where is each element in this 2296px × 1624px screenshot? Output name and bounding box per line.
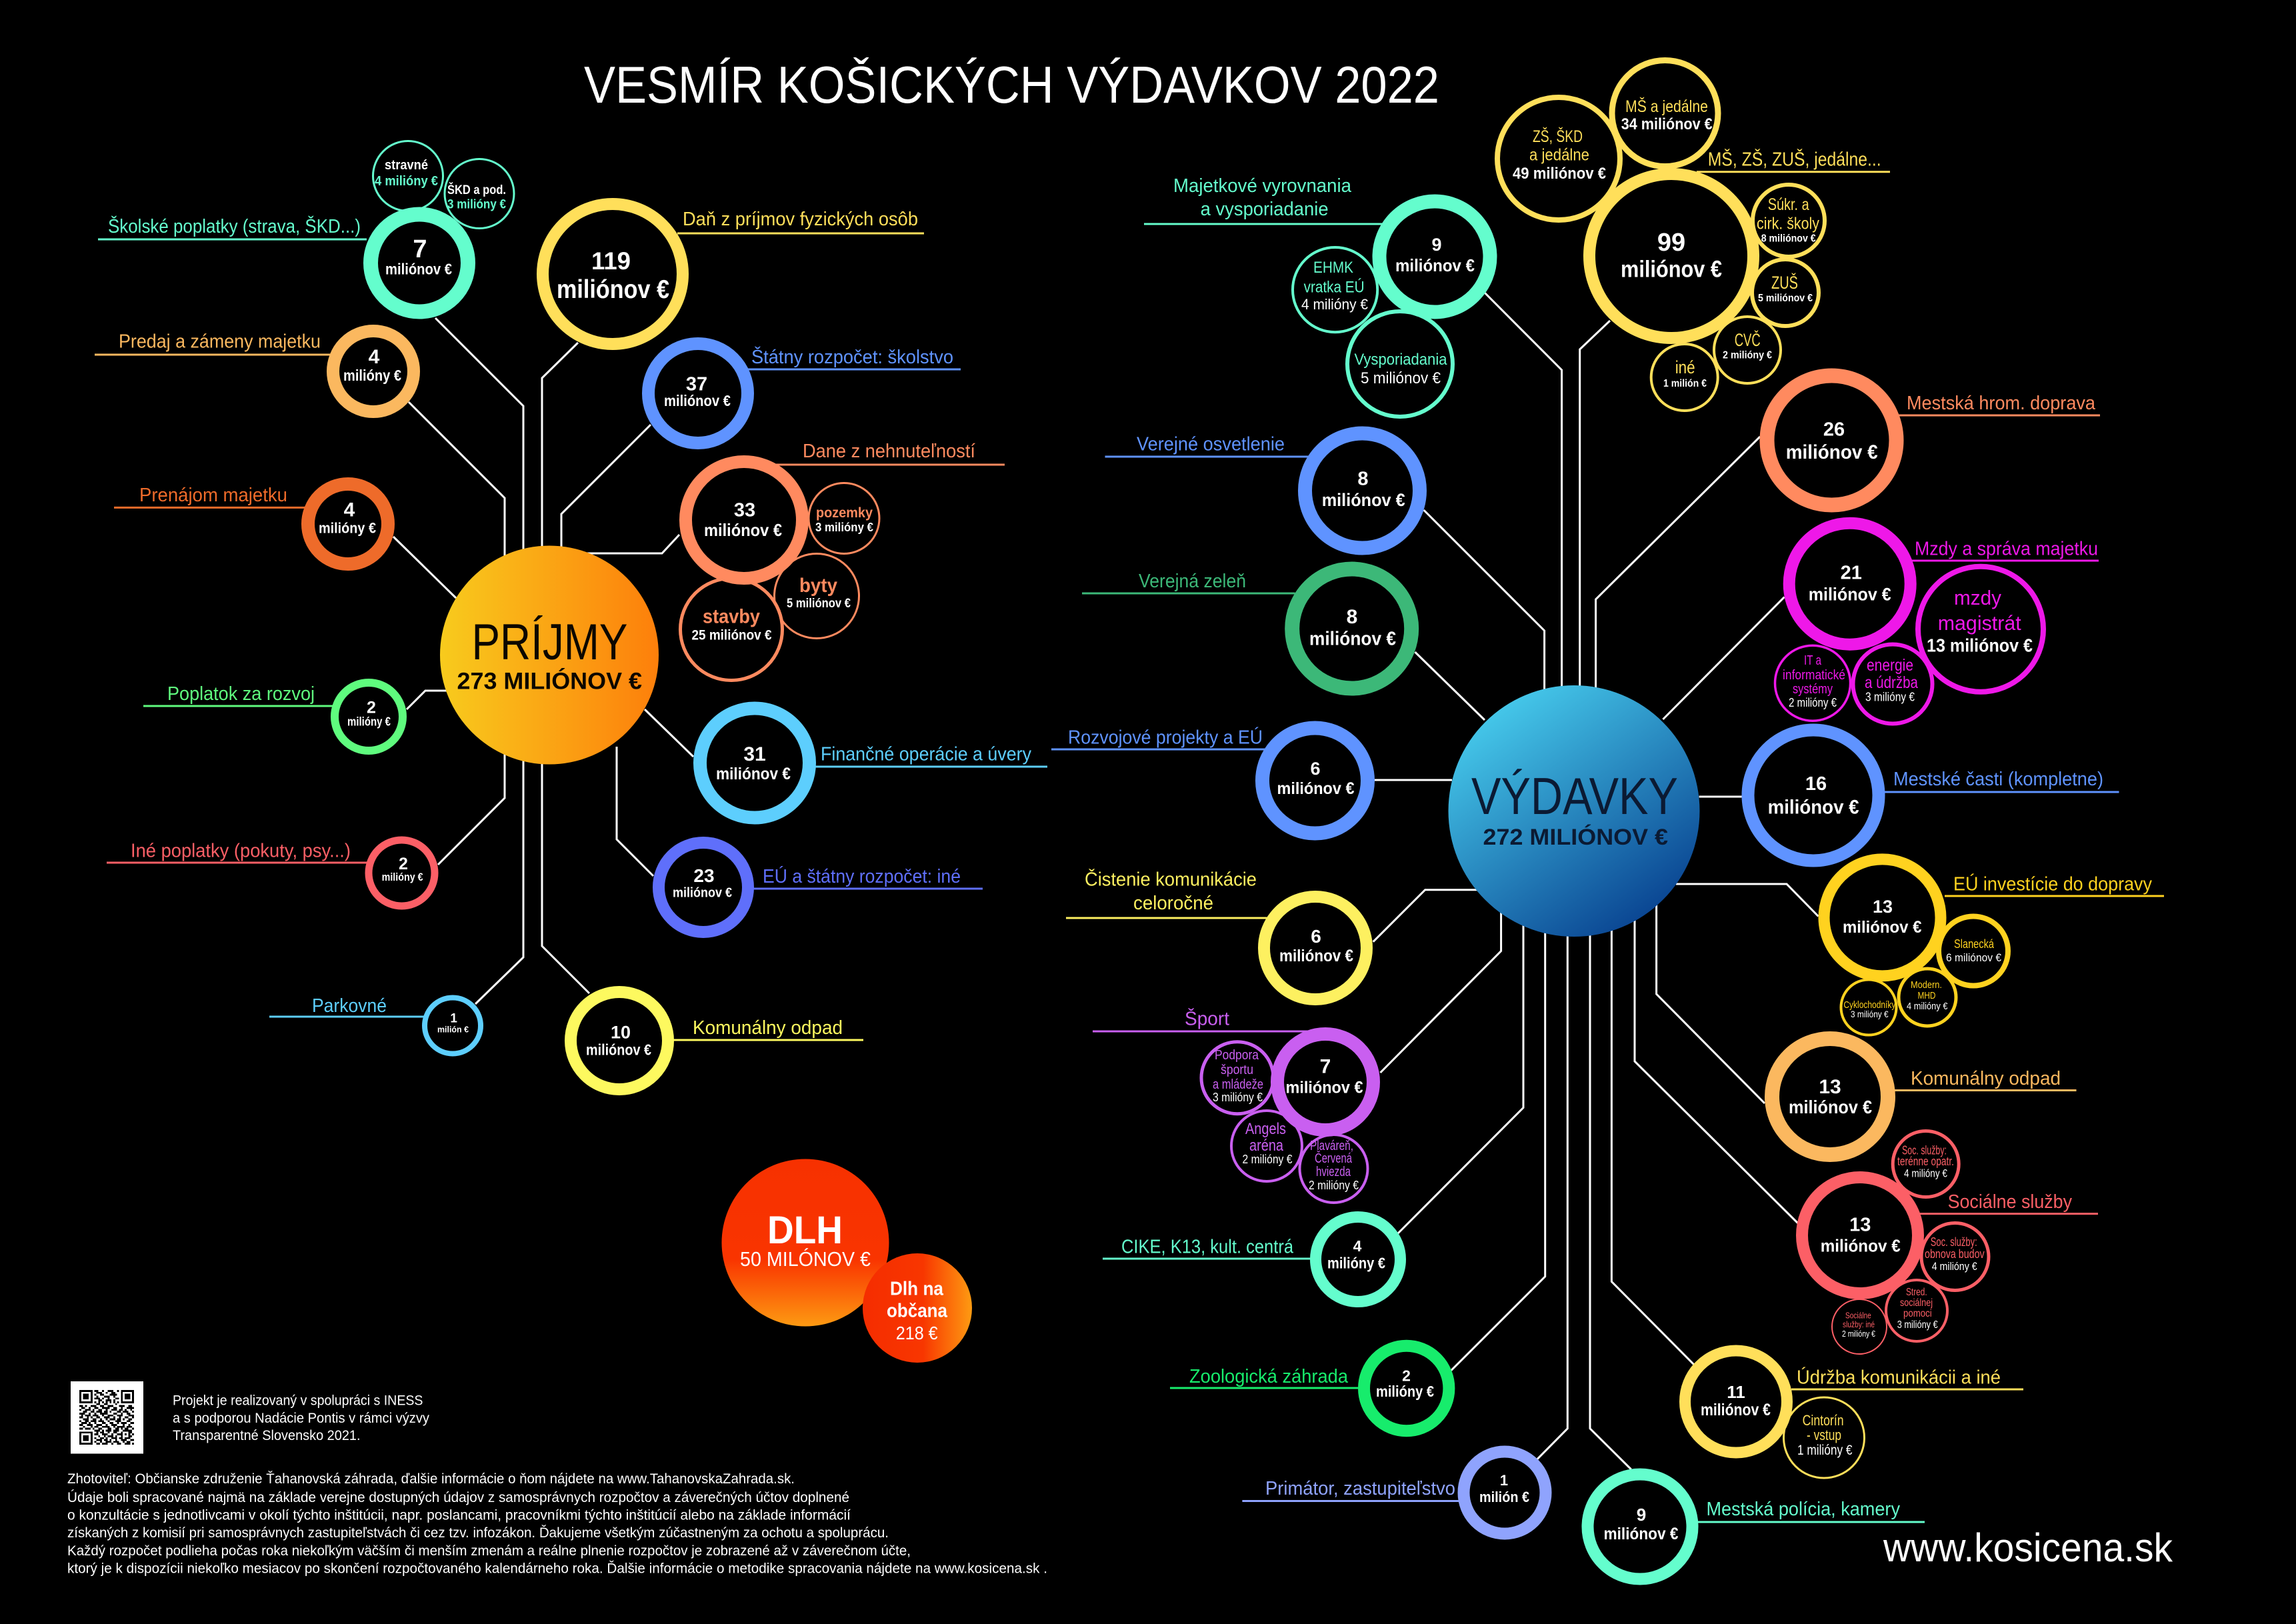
label: Rozvojové projekty: Rozvojové projekty a EÚ: [1068, 727, 1263, 749]
ring: 8 miliónov: miliónov €: [1322, 490, 1405, 510]
sub-bubble: CVČ: 2 milióny €: [1723, 349, 1772, 361]
sub-bubble: pozemky: pozemky: [816, 505, 873, 521]
sub-bubble: stravné: 4 milióny €: [375, 174, 438, 189]
sub-bubble: Stred. sociálnej pomoci: 3 milióny €: [1897, 1319, 1938, 1331]
ring: 16 miliónov: miliónov €: [1768, 797, 1859, 819]
sub-bubble: Cintorín: Cintorín: [1803, 1412, 1844, 1429]
label: Mzdy a správa majetku: Mzdy a správa majetku: [1915, 539, 2098, 560]
node: Komunálny odpad (príjmy): [571, 992, 863, 1089]
ring: 33 miliónov: 33: [734, 500, 755, 521]
node: Daň z príjmov: [543, 204, 924, 344]
sub-bubble: terénne opatrenia: [1893, 1131, 1959, 1197]
ring: 23 miliónov: 23: [693, 865, 715, 886]
sub-bubble: energie a údržba: [1853, 644, 1932, 724]
ring: 2 milióny: milióny €: [1376, 1383, 1434, 1400]
ring: 2 milióny: 2: [367, 698, 376, 717]
ring: 9 miliónov: [1588, 1475, 1692, 1579]
sub-bubble: pozemky: 3 milióny €: [815, 521, 873, 534]
sub-bubble: IT a informatické systémy: 2 milióny €: [1789, 696, 1837, 709]
ring: 9 miliónov: 9: [1431, 235, 1442, 255]
ring: 99 miliónov: [1589, 174, 1753, 338]
sub-bubble: Vysporiadania: Vysporiadania: [1355, 351, 1447, 369]
sub-bubble: iné: [1651, 344, 1718, 411]
hub: VÝDAVKY 272 miliónov: [1448, 685, 1700, 937]
ring: 2 milióny: [1364, 1346, 1449, 1431]
ring: 119 miliónov: miliónov €: [557, 275, 669, 304]
sub-bubble: Cyklochodníky: Cyklochodníky: [1843, 1000, 1896, 1011]
sub-bubble: byty: 5 miliónov €: [787, 597, 851, 611]
label: Parkovné: Parkovné: [312, 995, 387, 1017]
sub-bubble: Cintorín: - vstup: [1807, 1427, 1841, 1443]
hub: VÝDAVKY 272 miliónov: 272 MILIÓNOV €: [1483, 825, 1668, 850]
node: Verejné osvetlenie: [1105, 433, 1420, 548]
ring: 7 miliónov: 7: [413, 235, 427, 263]
ring: 11 miliónov: miliónov €: [1701, 1401, 1771, 1419]
sub-bubble: Angels aréna: aréna: [1249, 1137, 1284, 1155]
ring: 16 miliónov: 16: [1805, 773, 1827, 795]
ring: 13 miliónov: miliónov €: [1789, 1097, 1872, 1117]
ring: 13 miliónov: miliónov €: [1843, 918, 1922, 937]
website url: www.kosicena.sk: [1883, 1525, 2173, 1570]
sub-bubble: energie a údržba: 3 milióny €: [1865, 691, 1915, 704]
node: Poplatok za rozvoj: [143, 683, 403, 751]
sub-bubble: Stred. sociálnej pomoci: sociálnej: [1900, 1297, 1933, 1309]
sub-bubble: mzdy magistrát: 13 miliónov €: [1927, 635, 2033, 656]
text block: zhotoviteľ a metodika: Každý rozpočet podlieha počas roka niekoľkým väčším či menším zmenám a reálne plnenie rozpočtov je zobrazené až v záverečnom účte,: [67, 1543, 911, 1559]
sub-bubble: Súkr. a cirk. školy: 8 miliónov €: [1761, 233, 1816, 244]
ring: 6 miliónov: 6: [1310, 759, 1321, 779]
label: Údržba komunikácii: Údržba komunikácii a iné: [1797, 1367, 2001, 1388]
label: Finančné operácie: Finančné operácie a úvery: [821, 744, 1031, 765]
node: Mzdy a správa majetku: [1775, 523, 2099, 724]
ring: 4 milióny: milióny €: [319, 520, 376, 536]
sub-bubble: stavby: [680, 579, 783, 680]
sub-bubble: Stred. sociálnej pomoci: Stred.: [1906, 1287, 1927, 1298]
sub-bubble: Modern. MHD: MHD: [1917, 990, 1936, 1001]
ring: 7 miliónov: [371, 215, 468, 312]
label: Mestská polícia: Mestská polícia, kamery: [1707, 1499, 1900, 1520]
label: Verejná zeleň: Verejná zeleň: [1139, 571, 1246, 592]
sub-bubble: Plaváreň: hviezda: [1316, 1165, 1351, 1179]
hub: PRÍJMY 273 miliónov: 273 MILIÓNOV €: [457, 668, 642, 695]
sub-bubble: terénne opatrenia: Soc. služby:: [1902, 1144, 1947, 1157]
sub-bubble: obnova budov: obnova budov: [1925, 1247, 1985, 1261]
ring: 8 miliónov: [1292, 569, 1411, 688]
sub-bubble: Cintorín: 1 milióny €: [1797, 1443, 1853, 1458]
ring: 119 miliónov: [543, 204, 683, 344]
sub-bubble: Podpora športu: 3 milióny €: [1213, 1091, 1263, 1104]
ring: 1 milión: milión €: [437, 1025, 469, 1035]
sub-bubble: CVČ: CVČ: [1735, 329, 1761, 350]
text block: zhotoviteľ a metodika: o konzultácie s jednotlivcami v okolí týchto inštitúcii, napr. poslancami, pracovníkmi týchto inštitúcií alebo na základe informácií: [67, 1508, 851, 1523]
text block: projekt: Transparentné Slovensko 2021.: [173, 1428, 360, 1443]
sub-bubble: EHMK vratka EÚ: [1293, 247, 1377, 332]
node: EÚ investície do dopravy: [1824, 859, 2164, 1035]
ring: 37 miliónov: miliónov €: [664, 392, 731, 409]
ring: 13 miliónov: [1802, 1177, 1918, 1293]
sub-bubble: ZUŠ: ZUŠ: [1771, 272, 1798, 293]
ring: 1 milión: [1464, 1452, 1545, 1533]
sub-bubble: ZŠ, ŠKD a jedálne: 49 miliónov €: [1513, 165, 1606, 183]
ring: 23 miliónov: miliónov €: [673, 885, 732, 900]
sub-bubble: stavby: stavby: [703, 605, 760, 628]
sub-bubble: sociálne služby iné: 2 milióny €: [1842, 1329, 1876, 1339]
label: Majetkové vyrovnania: [1144, 175, 1385, 224]
sub-bubble: ŠKD a pod.: 3 milióny €: [447, 198, 506, 212]
sub-bubble: Podpora športu: a mládeže: [1213, 1077, 1263, 1092]
sub-bubble: sociálne služby iné: Sociálne: [1845, 1311, 1871, 1321]
ring: 8 miliónov: 8: [1347, 606, 1357, 628]
ring: 37 miliónov: [648, 344, 748, 443]
ring: 26 miliónov: 26: [1823, 419, 1845, 441]
ring: 7 miliónov: 7: [1320, 1055, 1331, 1077]
text block: zhotoviteľ a metodika: Zhotoviteľ: Občianske združenie Ťahanovská záhrada, ďalšie informácie o ňom nájdete na www.TahanovskaZahrada.sk.: [67, 1471, 795, 1487]
ring: 2 milióny: 2: [1402, 1367, 1411, 1385]
label: Čistenie komunikácie: celoročné: [1133, 893, 1213, 914]
node: Rozvojové projekty: [1051, 727, 1368, 833]
node: Komunálny odpad (výdavky): [1772, 1039, 2076, 1155]
ring: 16 miliónov: [1748, 730, 1879, 861]
label: Iné poplatky: Iné poplatky (pokuty, psy...): [131, 841, 351, 862]
sub-bubble: ZŠ, ŠKD a jedálne: ZŠ, ŠKD: [1533, 127, 1583, 146]
bubble: DLH 50 miliónov: [721, 1159, 889, 1327]
sub-bubble: Plaváreň: [1300, 1135, 1368, 1203]
node: Prenájom majetku: [114, 484, 388, 564]
ring: 1 milión: 1: [450, 1012, 457, 1026]
label: Majetkové vyrovnania: Majetkové vyrovnania: [1173, 175, 1352, 197]
sub-bubble: mzdy magistrát: magistrát: [1938, 611, 2021, 635]
text block: zhotoviteľ a metodika: [67, 1471, 1047, 1577]
sub-bubble: Súkr. a cirk. školy: [1753, 185, 1825, 257]
sub-bubble: mzdy magistrát: mzdy: [1954, 586, 2001, 609]
sub-bubble: terénne opatrenia: 4 milióny €: [1904, 1167, 1947, 1180]
sub-bubble: energie a údržba: a údržba: [1865, 673, 1918, 692]
node: Mestské časti: [1748, 730, 2119, 861]
sub-bubble: Cintorín: [1784, 1397, 1864, 1478]
ring: 8 miliónov: miliónov €: [1309, 628, 1396, 649]
ring: 99 miliónov: 99: [1657, 229, 1685, 257]
sub-bubble: energie a údržba: energie: [1867, 656, 1913, 675]
label: Zoologická záhrada: Zoologická záhrada: [1189, 1366, 1349, 1387]
sub-bubble: Angels aréna: 2 milióny €: [1243, 1153, 1292, 1166]
node: Čistenie komunikácie: [1066, 868, 1367, 999]
ring: 33 miliónov: [685, 461, 803, 579]
ring: 9 miliónov: miliónov €: [1604, 1525, 1679, 1543]
sub-bubble: Vysporiadania: [1347, 311, 1453, 417]
label: Komunálny odpad: Komunálny odpad: [1911, 1068, 2061, 1089]
bubble: Dlh na občana: Dlh na: [890, 1279, 944, 1300]
node: Mestská hrom. doprava: [1767, 376, 2100, 505]
bubble: Dlh na občana: [863, 1253, 972, 1363]
bubble: Dlh na občana: 218 €: [896, 1323, 938, 1343]
ring: 7 miliónov: miliónov €: [385, 261, 452, 278]
panel: dlh: [721, 1159, 972, 1363]
connector lines: výdavky: [1373, 293, 1819, 1469]
sub-bubble: Plaváreň: 2 milióny €: [1309, 1179, 1359, 1192]
ring: 13 miliónov: 13: [1873, 897, 1893, 917]
label: Mestská hrom. doprava: Mestská hrom. doprava: [1907, 393, 2096, 414]
sub-bubble: stravné: stravné: [385, 158, 428, 173]
sub-bubble: ŠKD a pod.: ŠKD a pod.: [447, 183, 506, 197]
ring: 13 miliónov: miliónov €: [1821, 1236, 1901, 1256]
sub-bubble: Stred. sociálnej pomoci: [1886, 1280, 1947, 1341]
label: Majetkové vyrovnania: a vysporiadanie: [1201, 199, 1329, 220]
sub-bubble: ZŠ, ŠKD a jedálne: [1497, 97, 1620, 220]
node: Šport: [1093, 1007, 1373, 1203]
label: Čistenie komunikácie: Čistenie komunikácie: [1085, 868, 1257, 891]
text block: zhotoviteľ a metodika: Údaje boli spracované najmä na základe verejne dostupných údajov z samosprávnych rozpočtov a záverečných účtov doplnené: [67, 1490, 849, 1505]
node: Zoologická záhrada: [1170, 1346, 1449, 1431]
sub-bubble: CVČ: [1714, 317, 1781, 383]
label: EÚ investície: EÚ investície do dopravy: [1953, 873, 2152, 895]
sub-bubble: Cyklochodníky: 3 milióny €: [1851, 1009, 1889, 1019]
sub-bubble: ZUŠ: [1752, 259, 1819, 326]
ring: 2 milióny: milióny €: [347, 715, 391, 728]
node: Majetkové vyrovnania: [1144, 175, 1490, 417]
ring: 7 miliónov: [1277, 1034, 1373, 1130]
ring: 37 miliónov: 37: [686, 373, 707, 395]
sub-bubble: Stred. sociálnej pomoci: pomoci: [1903, 1308, 1932, 1319]
sub-bubble: Slanecká: 6 miliónov €: [1946, 951, 2001, 964]
ring: 31 miliónov: [700, 708, 809, 817]
label: Čistenie komunikácie: [1066, 868, 1267, 918]
node: Dane z nehnuteľností: [680, 441, 1005, 680]
sub-bubble: sociálne služby iné: [1832, 1299, 1887, 1354]
title: VESMÍR KOŠICKÝCH VÝDAVKOV 2022: [584, 55, 1439, 114]
sub-bubble: Slanecká: Slanecká: [1954, 937, 1995, 951]
ring: 8 miliónov: 8: [1357, 469, 1369, 490]
node: Iné poplatky: [107, 840, 435, 906]
text block: projekt: Projekt je realizovaný v spolupráci s INESS: [173, 1393, 423, 1408]
label: Sociálne služby: Sociálne služby: [1948, 1191, 2072, 1213]
sub-bubble: Modern. MHD: 4 milióny €: [1907, 1001, 1948, 1012]
sub-bubble: obnova budov: 4 milióny €: [1932, 1260, 1977, 1273]
ring: 2 milióny: milióny €: [382, 871, 423, 883]
sub-bubble: Podpora športu: športu: [1221, 1063, 1253, 1077]
ring: 21 miliónov: [1789, 523, 1911, 645]
label: CIKE, K13: CIKE, K13, kult. centrá: [1121, 1237, 1294, 1258]
sub-bubble: ŠKD a pod.: [445, 159, 514, 228]
label: EÚ a štátny rozpočet: EÚ a štátny rozpočet: iné: [763, 865, 961, 887]
ring: 4 milióny: 4: [369, 346, 380, 368]
node: Štátny rozpočet školstvo: [648, 344, 961, 443]
sub-bubble: iné: 1 milión €: [1663, 378, 1707, 389]
sub-bubble: sociálne služby iné: služby: iné: [1843, 1319, 1875, 1329]
label: Mestské časti: Mestské časti (kompletne): [1893, 769, 2103, 790]
sub-bubble: IT a informatické systémy: IT a: [1804, 653, 1822, 668]
sub-bubble: Slanecká: [1939, 916, 2008, 985]
sub-bubble: EHMK vratka EÚ: EHMK: [1313, 259, 1353, 277]
panel: príjmy: [95, 141, 1047, 1089]
sub-bubble: MŠ a jedálne: MŠ a jedálne: [1625, 97, 1708, 116]
ring: 119 miliónov: 119: [591, 247, 631, 275]
sub-bubble: Modern. MHD: Modern.: [1911, 979, 1942, 991]
bubble: DLH 50 miliónov: DLH: [767, 1209, 843, 1252]
ring: 6 miliónov: [1264, 897, 1367, 999]
node: Verejná zeleň: [1082, 569, 1411, 688]
ring: 21 miliónov: miliónov €: [1809, 585, 1891, 605]
sub-bubble: iné: iné: [1675, 357, 1695, 377]
ring: 2 milióny: [335, 683, 403, 751]
hub: VÝDAVKY 272 miliónov: VÝDAVKY: [1471, 767, 1678, 825]
ring: 13 miliónov: 13: [1819, 1076, 1841, 1098]
ring: 6 miliónov: 6: [1311, 926, 1321, 947]
sub-bubble: Angels aréna: [1231, 1111, 1302, 1181]
sub-bubble: Plaváreň: Plaváreň,: [1310, 1139, 1353, 1153]
ring: 4 milióny: 4: [1353, 1237, 1362, 1255]
node: školstvo: [1497, 60, 1890, 411]
node: CIKE, K13: [1103, 1217, 1400, 1301]
sub-bubble: ZŠ, ŠKD a jedálne: a jedálne: [1529, 146, 1589, 165]
label: Školské poplatky: Školské poplatky (strava, ŠKD...): [108, 215, 361, 237]
sub-bubble: EHMK vratka EÚ: vratka EÚ: [1304, 279, 1365, 297]
ring: 6 miliónov: [1263, 728, 1368, 833]
node: Sociálne služby: [1802, 1131, 2098, 1354]
bubble: DLH 50 miliónov: 50 MILÓNOV €: [740, 1247, 871, 1271]
sub-bubble: mzdy magistrát: [1918, 567, 2043, 692]
sub-bubble: Modern. MHD: [1899, 969, 1956, 1026]
label: Poplatok za rozvoj: Poplatok za rozvoj: [167, 683, 315, 705]
sub-bubble: EHMK vratka EÚ: 4 milióny €: [1301, 296, 1368, 313]
ring: 6 miliónov: miliónov €: [1279, 947, 1353, 965]
sub-bubble: byty: byty: [799, 575, 837, 597]
ring: 4 milióny: [333, 331, 413, 412]
ring: 2 milióny: 2: [399, 855, 408, 873]
node: Mestská polícia: [1588, 1475, 1925, 1579]
label: Daň z príjmov: Daň z príjmov fyzických osôb: [683, 209, 918, 230]
ring: 11 miliónov: 11: [1727, 1382, 1745, 1402]
ring: 31 miliónov: 31: [743, 743, 766, 765]
label: Verejné osvetlenie: Verejné osvetlenie: [1137, 434, 1285, 455]
sub-bubble: IT a informatické systémy: [1775, 645, 1851, 721]
panel: výdavky: [1051, 60, 2164, 1579]
node: Primátor: [1242, 1452, 1545, 1533]
ring: 10 miliónov: 10: [611, 1023, 631, 1043]
ring: 7 miliónov: miliónov €: [1285, 1078, 1363, 1097]
ring: 9 miliónov: 9: [1637, 1505, 1646, 1525]
node: Predaj a zámeny: [95, 331, 413, 412]
sub-bubble: MŠ a jedálne: [1612, 60, 1718, 167]
node: Školské poplatky: [98, 141, 514, 312]
ring: 1 milión: [425, 997, 481, 1053]
ring: 26 miliónov: [1767, 376, 1896, 505]
ring: 31 miliónov: miliónov €: [716, 765, 791, 783]
label: MŠ, ZŠ, ZUŠ: MŠ, ZŠ, ZUŠ, jedálne...: [1708, 148, 1881, 171]
label: Komunálny odpad: Komunálny odpad: [693, 1017, 843, 1039]
ring: 26 miliónov: miliónov €: [1786, 441, 1878, 463]
label: Šport: Šport: [1185, 1007, 1229, 1029]
sub-bubble: Podpora športu: Podpora: [1215, 1048, 1259, 1063]
text block: projekt: a s podporou Nadácie Pontis v rámci výzvy: [173, 1411, 429, 1426]
sub-bubble: Angels aréna: Angels: [1245, 1120, 1286, 1138]
sub-bubble: Podpora športu: [1201, 1042, 1273, 1114]
text block: zhotoviteľ a metodika: ktorý je k dispozícii niekoľko mesiacov po skončení rozpočtovaného kalendárneho roka. Ďalšie informácie o metodike spracovania nájdete na www.kosicena.sk .: [67, 1561, 1047, 1577]
sub-bubble: MŠ a jedálne: 34 miliónov €: [1621, 115, 1713, 133]
ring: 9 miliónov: miliónov €: [1395, 255, 1475, 275]
node: EÚ a štátny rozpočet: [659, 843, 983, 932]
connector lines: príjmy: [393, 318, 693, 1004]
sub-bubble: stavby: 25 miliónov €: [692, 627, 772, 643]
ring: 33 miliónov: miliónov €: [704, 520, 782, 540]
ring: 8 miliónov: [1305, 433, 1420, 548]
label: Primátor: Primátor, zastupiteľstvo: [1265, 1478, 1455, 1499]
ring: 9 miliónov: [1379, 201, 1490, 312]
sub-bubble: terénne opatrenia: terénne opatr.: [1897, 1155, 1954, 1168]
sub-bubble: obnova budov: Soc. služby:: [1931, 1235, 1977, 1249]
ring: 1 milión: milión €: [1479, 1489, 1529, 1505]
sub-bubble: IT a informatické systémy: informatické: [1783, 668, 1845, 683]
ring: 4 milióny: milióny €: [1327, 1255, 1385, 1272]
sub-bubble: Súkr. a cirk. školy: cirk. školy: [1757, 214, 1819, 233]
text block: zhotoviteľ a metodika: získaných z komisií pri samosprávnych zastupiteľstvách či cez tzv. infozákon. Ďakujeme všetkým zúčastneným za ochotu a spoluprácu.: [67, 1525, 889, 1541]
node: Finančné operácie: [700, 708, 1047, 817]
label: Dane z nehnuteľností: Dane z nehnuteľností: [803, 441, 975, 462]
sub-bubble: stravné: [373, 141, 443, 211]
label: Predaj a zámeny: Predaj a zámeny majetku: [119, 331, 321, 353]
ring: 4 milióny: [308, 484, 388, 564]
sub-bubble: Plaváreň: Červená: [1315, 1151, 1353, 1166]
ring: 10 miliónov: [571, 992, 668, 1089]
label: Prenájom majetku: Prenájom majetku: [139, 485, 287, 506]
sub-bubble: ZUŠ: 5 miliónov €: [1758, 293, 1813, 304]
hub: PRÍJMY 273 miliónov: [440, 545, 659, 764]
sub-bubble: byty: [775, 553, 859, 639]
ring: 1 milión: 1: [1500, 1472, 1508, 1489]
ring: 2 milióny: [369, 840, 435, 906]
sub-bubble: Súkr. a cirk. školy: Súkr. a: [1768, 195, 1809, 214]
ring: 13 miliónov: [1772, 1039, 1888, 1155]
ring: 23 miliónov: [659, 843, 748, 932]
node: Údržba komunikácií: [1685, 1351, 2023, 1478]
text block: projekt: [173, 1393, 429, 1443]
sub-bubble: obnova budov: [1921, 1223, 1989, 1291]
sub-bubble: Vysporiadania: 5 miliónov €: [1361, 369, 1441, 387]
ring: 4 milióny: 4: [344, 499, 355, 521]
ring: 13 miliónov: [1824, 859, 1941, 976]
ring: 4 milióny: milióny €: [343, 367, 401, 384]
ring: 99 miliónov: miliónov €: [1621, 257, 1722, 283]
ring: 21 miliónov: 21: [1841, 563, 1862, 584]
ring: 13 miliónov: 13: [1849, 1215, 1871, 1236]
icon: QR code: [71, 1381, 143, 1453]
sub-bubble: pozemky: [809, 483, 879, 553]
ring: 4 milióny: [1316, 1217, 1400, 1301]
node: Parkovné: [269, 995, 481, 1053]
sub-bubble: IT a informatické systémy: systémy: [1793, 682, 1833, 697]
bubble: Dlh na občana: občana: [887, 1301, 948, 1322]
sub-bubble: Cyklochodníky: [1841, 980, 1896, 1035]
label: Štátny rozpočet: Štátny rozpočet: školstvo: [751, 345, 953, 368]
ring: 6 miliónov: miliónov €: [1277, 779, 1355, 798]
hub: PRÍJMY 273 miliónov: PRÍJMY: [472, 614, 628, 671]
ring: 11 miliónov: [1685, 1351, 1787, 1453]
ring: 10 miliónov: miliónov €: [586, 1041, 651, 1059]
